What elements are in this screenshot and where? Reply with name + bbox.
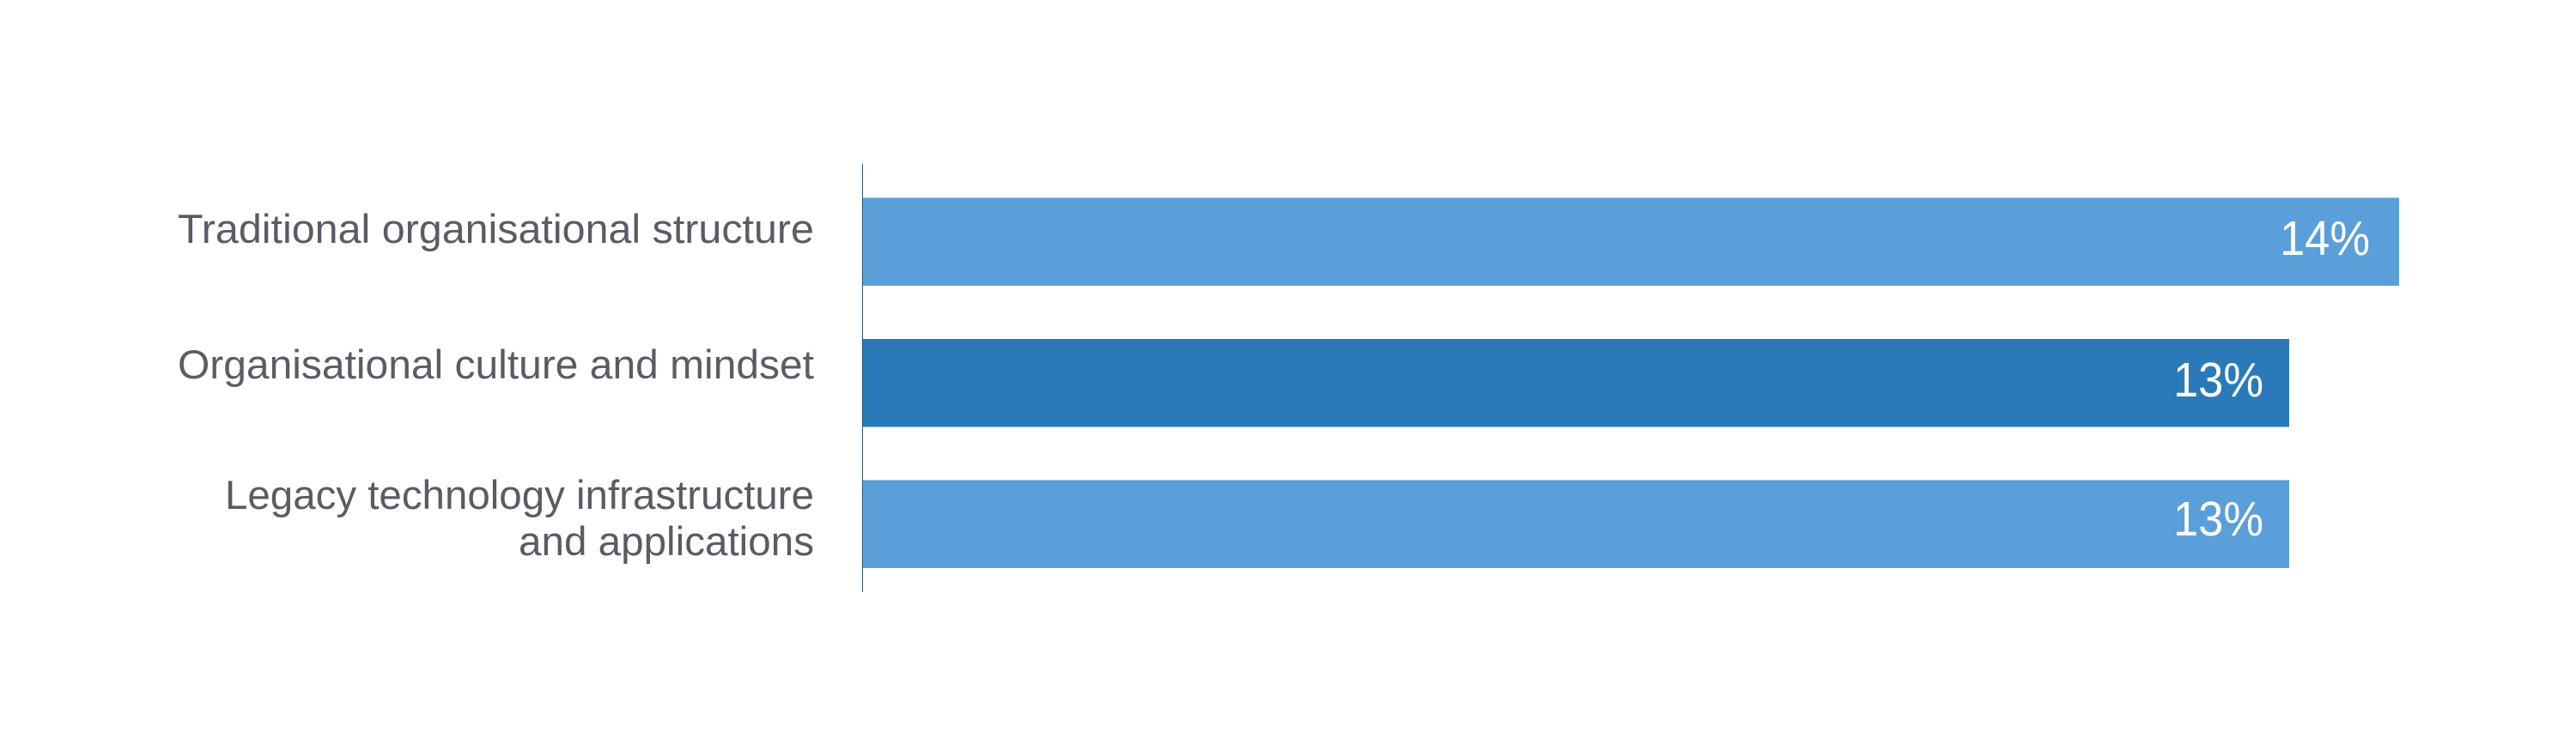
label: legacy technology infrastructure and applications — [225, 472, 814, 564]
bar: legacy technology infrastructure 13%: 13% — [2173, 492, 2263, 547]
bar: organisational culture and mindset 13%: 13% — [2173, 353, 2263, 408]
label: legacy technology infrastructure and applications: Legacy technology infrastructure — [225, 472, 814, 517]
label: legacy technology infrastructure and applications: and applications — [519, 518, 814, 564]
label: traditional organisational structure: Traditional organisational structure — [178, 206, 814, 251]
bar: legacy technology infrastructure 13% — [862, 481, 2289, 568]
bar: traditional organisational structure 14% — [862, 197, 2399, 286]
bar: traditional organisational structure 14%: 14% — [2280, 211, 2370, 266]
label: organisational culture and mindset: Organisational culture and mindset — [178, 342, 814, 387]
axis line — [862, 164, 863, 592]
bar: organisational culture and mindset 13% — [862, 339, 2289, 427]
